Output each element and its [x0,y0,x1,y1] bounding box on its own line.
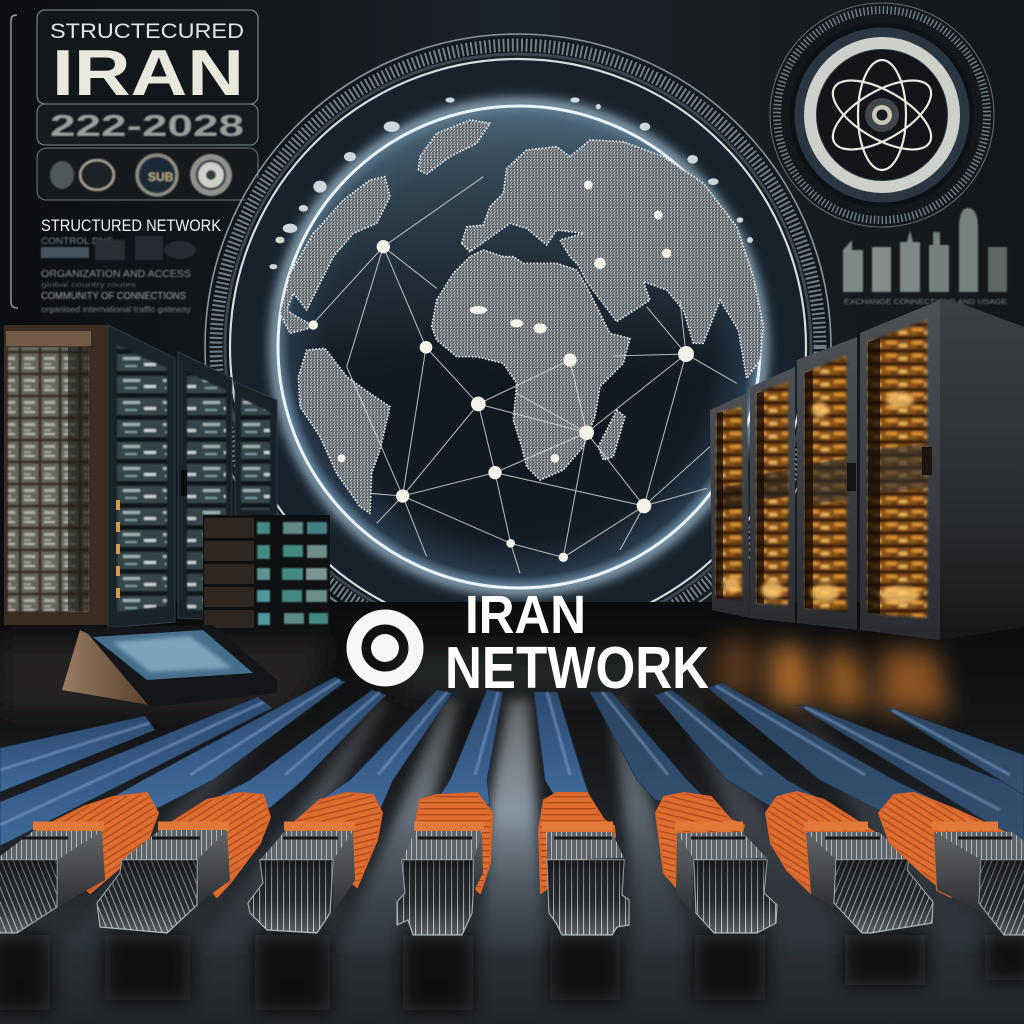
panel: badges [37,148,258,200]
chart caption: EXCHANGE CONNECTIONS AND USAGE [844,299,1007,306]
right server racks [710,300,1024,640]
North America [280,177,390,333]
continents [280,120,763,513]
logo text: iran: IRAN [465,585,586,645]
badge 2 [137,155,177,195]
date box [37,104,258,145]
plug 3 [248,793,382,933]
plug 5 [539,793,629,935]
caption line: CONTROL DNS [41,236,113,246]
rack 4 [235,382,277,520]
ring lights [269,97,753,269]
atom nucleus [865,98,899,132]
plug 7 [766,792,933,933]
left server racks [4,325,277,628]
globe [276,104,763,590]
globe frame ring [205,34,831,660]
network nodes [309,181,694,562]
heading: iran: IRAN [52,36,244,109]
cable highlights [0,680,1010,825]
rack 1 [4,325,108,625]
globe sphere [278,106,760,588]
rack C [797,337,857,630]
plug reflections [0,935,1024,1010]
text block: structured network [41,216,222,314]
atom orbits [822,60,942,170]
body line 3: COMMUNITY OF CONNECTIONS [41,291,186,302]
plug 1 [0,793,158,933]
rack glow [723,392,920,604]
table surface [0,602,1024,1024]
plug 6 [656,793,777,933]
plug 8 [879,793,1024,940]
table reflections [0,640,950,712]
Madagascar [598,410,625,460]
tablet display [62,625,277,707]
tablet bezel [83,625,277,707]
panel: title [37,10,258,145]
map group [280,120,763,573]
Greenland [418,120,490,174]
logo text: network: NETWORK [445,635,709,701]
badge 2: SUB [148,170,174,184]
plug 2 [97,793,270,933]
South America [298,348,390,513]
plug 4 [397,793,492,935]
logo mark [354,617,416,679]
tablet wedge [62,630,150,705]
rack 3 [178,352,232,620]
atom medallion [770,3,994,227]
tablet screen [93,630,253,680]
date range: 222-2028 [50,108,244,143]
globe glow [276,104,762,590]
bar chart [843,208,1007,306]
subheading: STRUCTURED NETWORK [41,216,222,235]
Africa [432,250,630,480]
body line 4: organised international traffic gateway [41,304,192,314]
badge 1 [50,160,114,190]
Eurasia [462,140,763,378]
heading: structecured: STRUCTECURED [50,20,244,43]
rack A [710,393,750,618]
logo [354,585,709,701]
rack D [860,300,940,640]
rack 2 [108,325,175,628]
rack side [940,300,1024,640]
bracket line [11,15,18,308]
small icon strip [41,236,196,260]
cables [0,677,1024,846]
network lines [313,177,737,573]
floor light streaks [60,700,1000,950]
body line 2: global country routes [41,280,136,289]
rack B [750,367,795,623]
body line 1: ORGANIZATION AND ACCESS [41,269,191,280]
badge 3 [190,154,232,196]
small server stack [203,515,330,630]
